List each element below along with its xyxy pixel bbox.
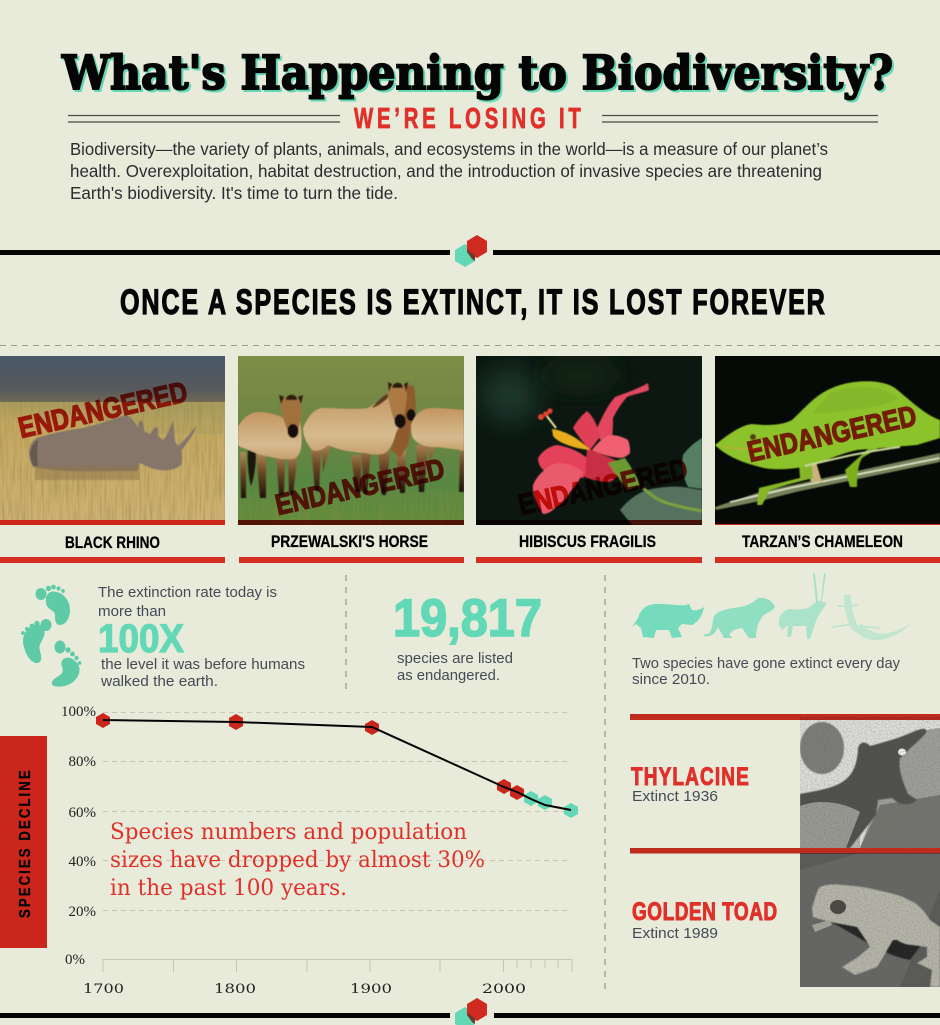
horse four bbox=[411, 408, 464, 492]
stat: endangered species bbox=[393, 589, 542, 684]
photo: chameleon bbox=[715, 356, 940, 525]
golden toad text: GOLDEN TOAD bbox=[632, 897, 777, 926]
x axis labels: 1900 bbox=[350, 982, 392, 997]
x axis labels bbox=[83, 982, 526, 997]
stat: extinction rate: The extinction rate today is bbox=[98, 585, 277, 601]
rhino body bbox=[29, 415, 197, 471]
photo: golden toad bbox=[800, 853, 940, 987]
stat: extinction per day: since 2010. bbox=[632, 672, 710, 688]
trend line bbox=[103, 720, 571, 810]
stat: endangered species: as endangered. bbox=[397, 668, 500, 684]
stat: extinction rate bbox=[98, 585, 305, 690]
chart callout: Species numbers and population bbox=[110, 820, 467, 845]
stat: extinction per day: Two species have gone extinct every day bbox=[632, 656, 901, 672]
petals bbox=[597, 383, 649, 440]
side label: species decline: SPECIES DECLINE bbox=[17, 770, 34, 918]
data points bbox=[96, 713, 578, 818]
chart callout: sizes have dropped by almost 30% bbox=[110, 848, 485, 873]
stat: extinction rate: the level it was before humans bbox=[101, 657, 305, 673]
photo: thylacine bbox=[800, 717, 940, 848]
stat: endangered species: 19,817 bbox=[393, 589, 542, 648]
y axis labels: 20% bbox=[68, 904, 96, 920]
thylacine text: THYLACINE bbox=[631, 762, 749, 791]
x axis labels: 1700 bbox=[83, 982, 124, 997]
stamp: horse: ENDANGERED bbox=[273, 453, 447, 522]
horse three behind bbox=[351, 385, 416, 493]
subtitle with rules: WE’RE LOSING IT bbox=[354, 103, 581, 135]
intro text: Earth's biodiversity. It's time to turn the tide. bbox=[70, 183, 398, 203]
photo: black rhino bbox=[0, 356, 225, 525]
photo: hibiscus bbox=[476, 356, 702, 525]
chameleon body bbox=[715, 381, 940, 469]
stat: extinction per day bbox=[632, 656, 901, 688]
section heading: ONCE A SPECIES IS EXTINCT, IT IS LOST FOREVER bbox=[120, 283, 825, 322]
chart callout bbox=[110, 820, 485, 901]
thylacine text: Extinct 1936 bbox=[632, 789, 718, 805]
icon: footprints bbox=[21, 585, 81, 687]
bottom divider with hexagons bbox=[0, 998, 940, 1025]
stamp: hibiscus: ENDANGERED bbox=[516, 453, 690, 522]
caption: horse: PRZEWALSKI'S HORSE bbox=[271, 533, 428, 551]
golden toad text bbox=[632, 897, 777, 942]
golden toad bar bbox=[630, 848, 940, 854]
y axis labels bbox=[61, 704, 96, 968]
stat: extinction rate: more than bbox=[98, 604, 166, 620]
side label: species decline bbox=[0, 736, 47, 948]
branch bbox=[715, 453, 940, 510]
line chart: species decline bbox=[61, 704, 578, 997]
horse two bbox=[303, 382, 408, 495]
stat: extinction rate: 100X bbox=[98, 617, 184, 661]
rear leg and front leg bbox=[844, 448, 878, 488]
y axis labels: 60% bbox=[68, 805, 96, 821]
intro text: health. Overexploitation, habitat destruction, and the introduction of invasive species are threatening bbox=[70, 161, 822, 181]
caption: black rhino: BLACK RHINO bbox=[65, 534, 160, 552]
stat: endangered species: species are listed bbox=[397, 651, 513, 667]
stamen bbox=[546, 415, 556, 428]
horse one bbox=[238, 395, 303, 498]
divider with hexagons bbox=[0, 235, 940, 267]
thylacine animal bbox=[800, 729, 926, 848]
toad animal bbox=[812, 884, 940, 987]
icon: extinct animal silhouettes bbox=[632, 573, 912, 640]
thylacine text bbox=[631, 762, 749, 805]
x axis labels: 2000 bbox=[482, 982, 526, 997]
x axis labels: 1800 bbox=[214, 982, 256, 997]
subtitle with rules bbox=[68, 103, 878, 135]
stat: extinction rate: walked the earth. bbox=[100, 674, 218, 690]
intro text bbox=[70, 139, 828, 203]
golden toad text: Extinct 1989 bbox=[632, 926, 718, 942]
y axis labels: 40% bbox=[68, 854, 96, 870]
y axis labels: 0% bbox=[65, 952, 85, 968]
y axis labels: 100% bbox=[61, 704, 96, 720]
intro text: Biodiversity—the variety of plants, animals, and ecosystems in the world—is a measure of our planet’s bbox=[70, 139, 828, 159]
y axis labels: 80% bbox=[68, 754, 96, 770]
stamp: rhino: ENDANGERED bbox=[16, 376, 190, 445]
thylacine bar bbox=[630, 714, 940, 720]
chart callout: in the past 100 years. bbox=[110, 876, 347, 901]
caption: chameleon: TARZAN’S CHAMELEON bbox=[742, 533, 903, 551]
caption: hibiscus: HIBISCUS FRAGILIS bbox=[519, 533, 656, 551]
leaves bbox=[620, 487, 702, 525]
photo: przewalski's horse bbox=[238, 356, 464, 525]
